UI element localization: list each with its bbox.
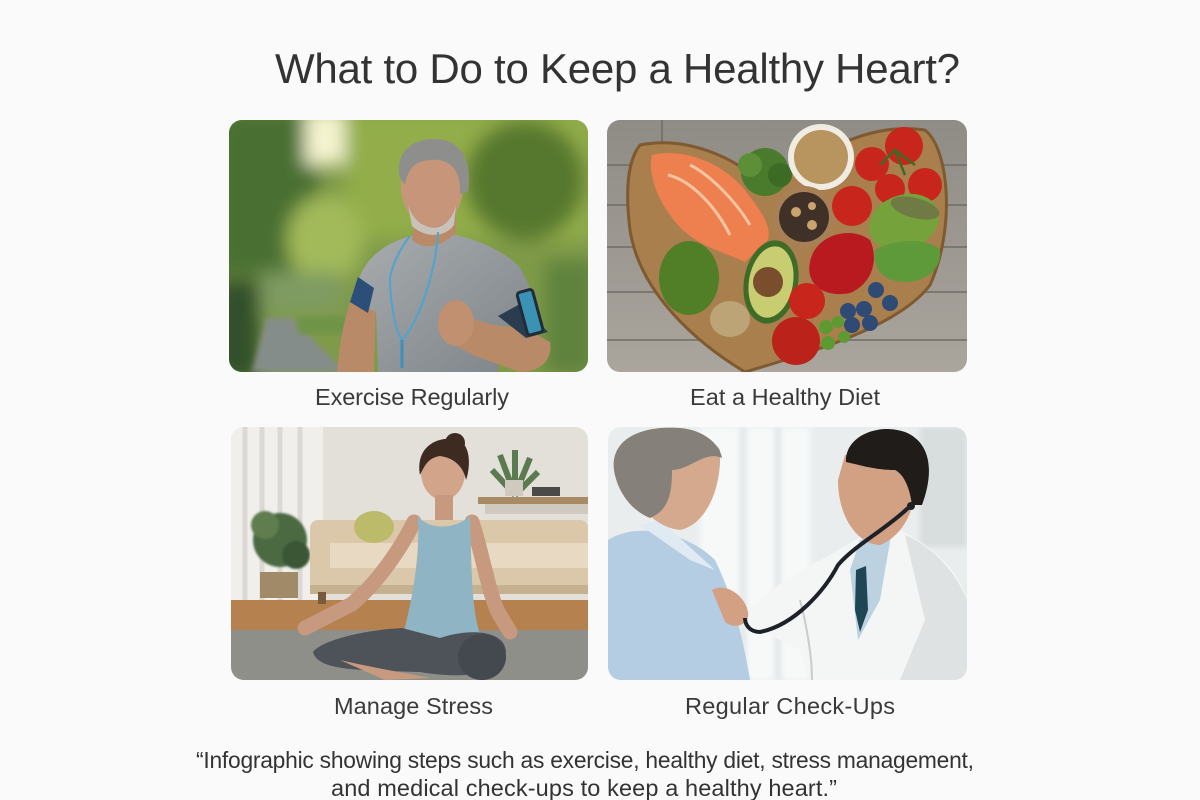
salmon <box>651 153 769 262</box>
broccoli <box>741 148 789 196</box>
heart tray <box>628 129 946 372</box>
floor plant <box>251 511 310 569</box>
runner <box>337 290 376 372</box>
panel: healthy diet photo <box>607 120 967 372</box>
doctor <box>735 525 967 680</box>
pepper <box>809 233 874 294</box>
bowls <box>788 124 854 190</box>
patient <box>608 531 750 680</box>
avocado half and whole <box>659 241 719 315</box>
panel: exercise regularly photo <box>229 120 588 372</box>
green fruit <box>861 184 947 260</box>
woman <box>305 522 414 628</box>
label: eat a healthy diet: Eat a Healthy Diet <box>690 384 880 410</box>
title: What to Do to Keep a Healthy Heart? <box>275 45 960 92</box>
tomatoes <box>855 147 889 181</box>
small items <box>789 283 825 319</box>
label: regular check-ups: Regular Check-Ups <box>685 693 895 719</box>
greens <box>875 241 940 282</box>
panel: manage stress photo <box>231 427 588 680</box>
label: manage stress: Manage Stress <box>334 693 493 719</box>
label: exercise regularly: Exercise Regularly <box>315 384 509 410</box>
panel: regular check-ups photo <box>608 427 967 680</box>
caption <box>196 747 974 800</box>
plant <box>492 450 538 495</box>
sofa <box>310 520 588 592</box>
caption: “Infographic showing steps such as exercise, healthy diet, stress management, <box>196 747 974 773</box>
